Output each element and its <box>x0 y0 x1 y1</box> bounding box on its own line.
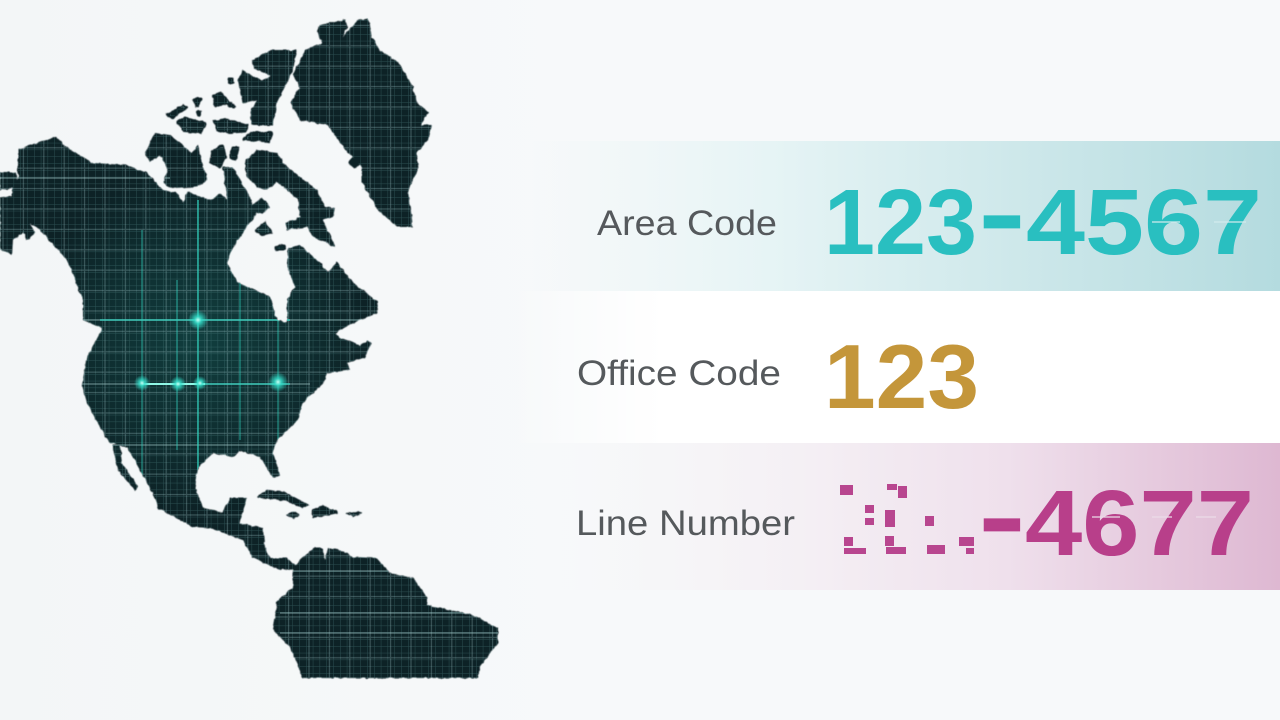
number: -4677: 4677 <box>1025 471 1254 575</box>
number: 123: 123 <box>824 327 979 428</box>
landmass: North, Central and South America <box>0 137 498 678</box>
landmass: Hispaniola <box>313 506 337 517</box>
landmass: Puerto Rico <box>347 513 362 516</box>
map glow nodes <box>134 310 288 392</box>
band: area code <box>530 141 1280 291</box>
map grid overlay <box>0 0 520 700</box>
landmass: Arctic islands <box>168 79 284 249</box>
landmasses <box>0 18 498 678</box>
label: line number: Line Number <box>576 504 795 543</box>
landmass: Baja California <box>112 445 138 490</box>
label: area code: Area Code <box>597 204 777 243</box>
number: 123-4567: - <box>980 162 1024 266</box>
label: office code: Office Code <box>577 354 781 393</box>
landmass: Disko Island <box>349 156 361 168</box>
map: the Americas <box>0 0 520 700</box>
landmass: Greenland <box>290 18 432 227</box>
landmass: Jamaica <box>287 512 299 518</box>
landmass: Victoria Island <box>145 133 208 188</box>
number: 123-4567: 123 <box>824 170 977 274</box>
number: 123-4567: 4567 <box>1026 170 1262 274</box>
landmass: Baffin Island <box>245 150 335 247</box>
band: line number <box>560 443 1280 590</box>
number: -4677: - <box>980 465 1024 569</box>
fragmented digits <box>840 484 974 554</box>
band: office code <box>510 291 1280 443</box>
number: 123-4567 <box>824 162 1262 274</box>
landmass: Cuba <box>258 490 308 508</box>
landmass: Ellesmere Island <box>238 50 297 125</box>
